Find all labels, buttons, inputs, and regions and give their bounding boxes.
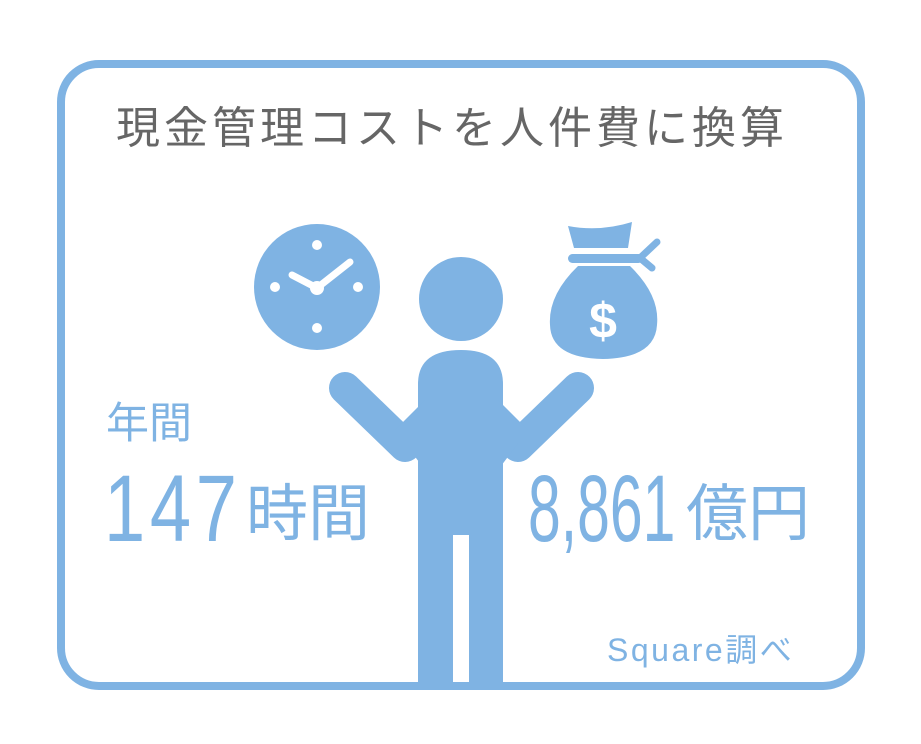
stat: 8,861億円 [528,456,810,562]
stat: 8,861億円: 8,861 [528,456,675,562]
icon: person [345,257,578,690]
icon: money bag [550,222,657,359]
stat: 8,861億円: 億円 [686,480,810,549]
icon: money bag: $ [589,293,617,349]
title: 現金管理コストを人件費に換算 [116,104,788,153]
stat: 147時間 [104,456,370,562]
frame [57,60,865,690]
stat: 147時間: 147 [104,456,242,562]
label: 年間: 年間 [106,400,192,448]
icon: clock [254,224,380,350]
stat: 147時間: 時間 [246,480,370,549]
source note: Square調べ [607,632,794,668]
